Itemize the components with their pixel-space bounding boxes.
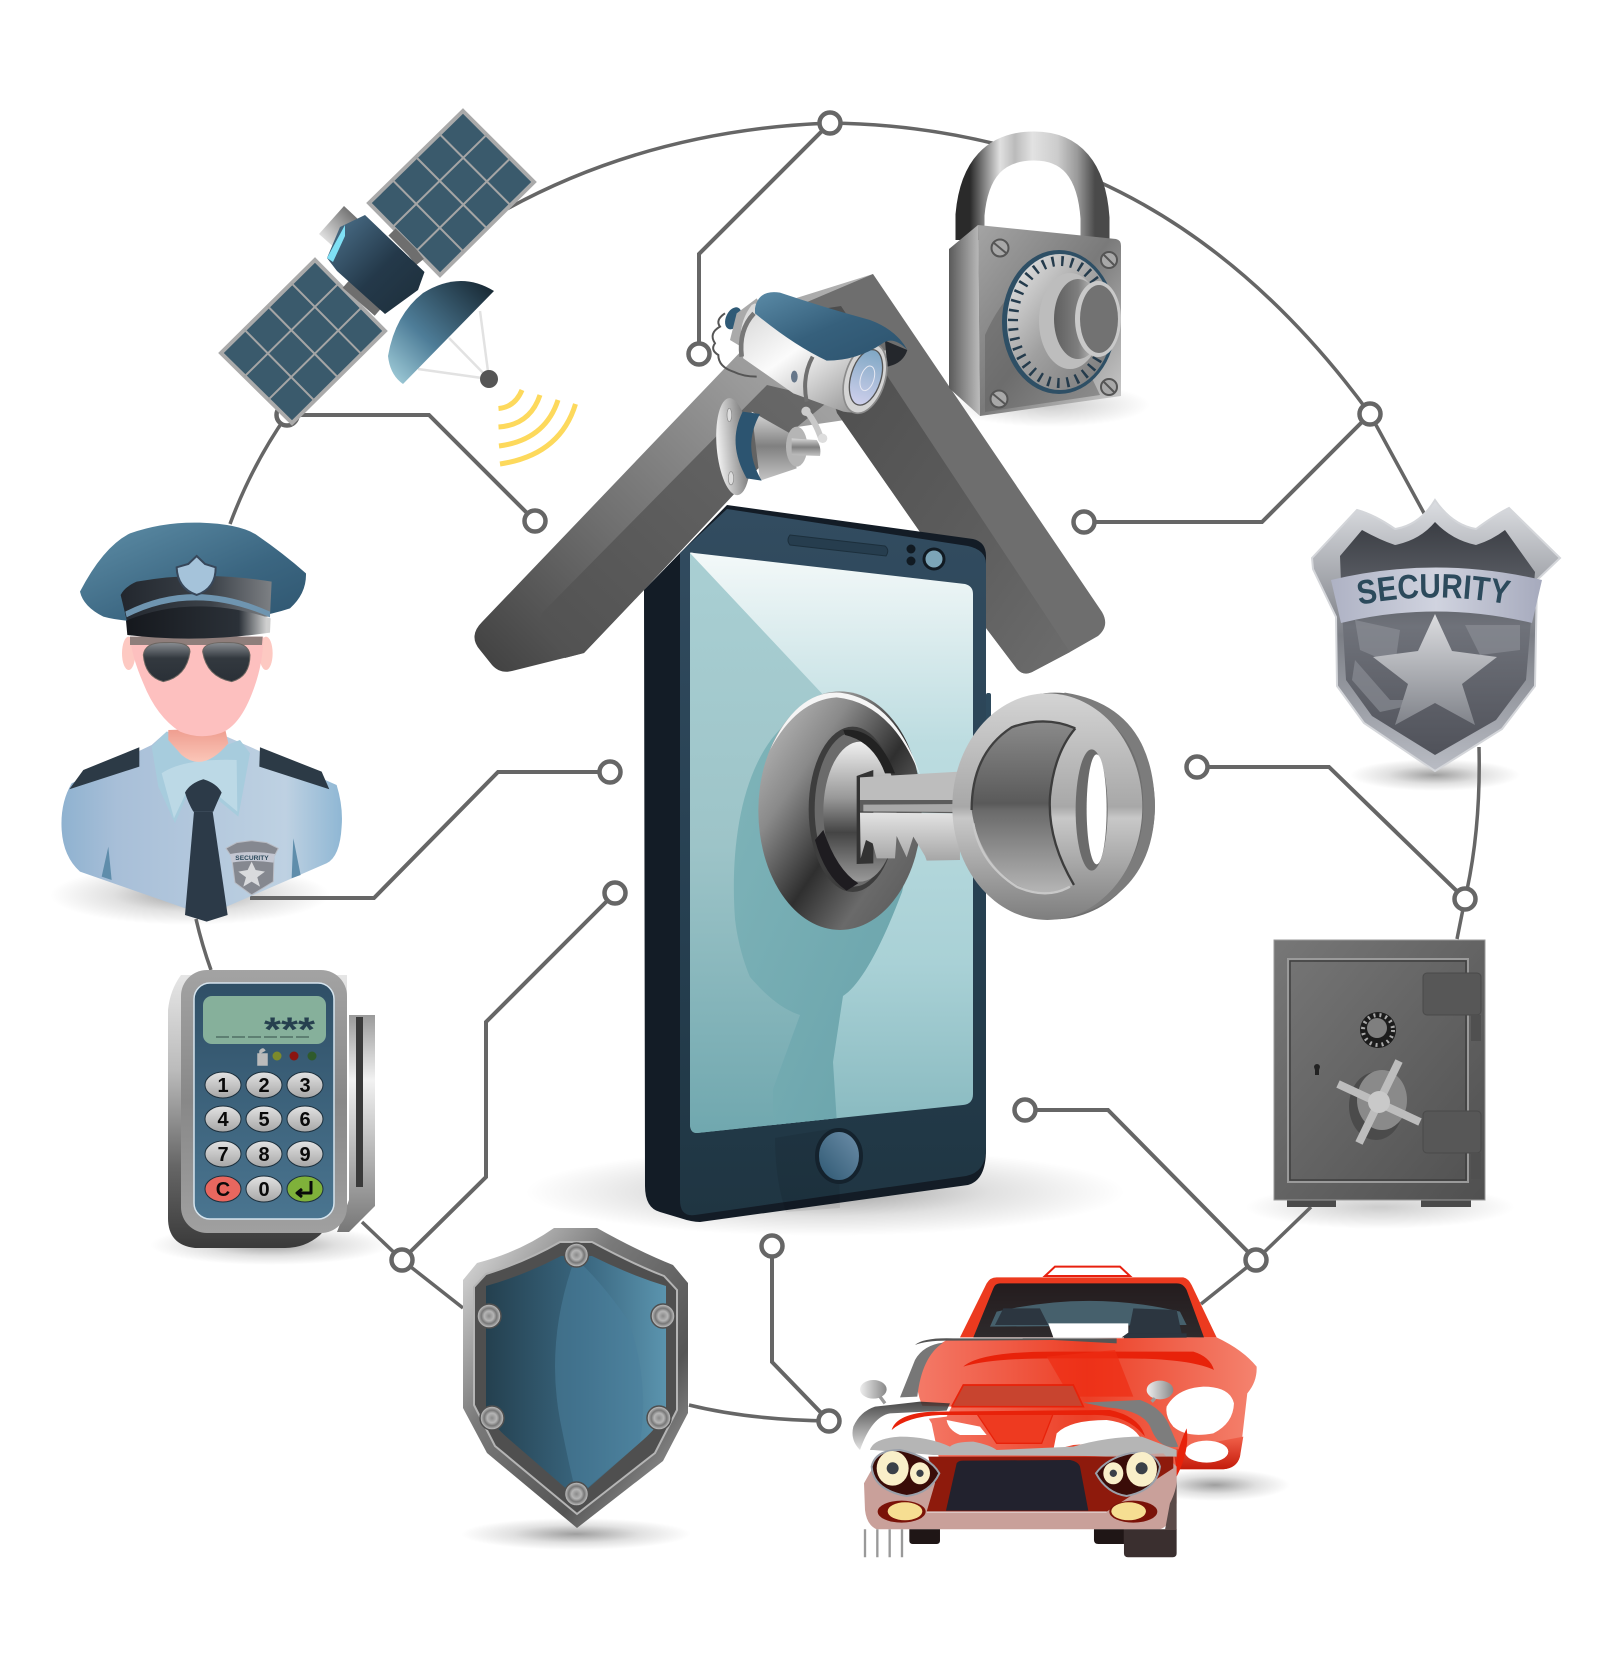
safe <box>1274 940 1485 1207</box>
speaker slot <box>788 535 888 556</box>
cap badge <box>177 556 216 595</box>
lower body <box>864 1453 1177 1529</box>
hood reflection <box>1047 1350 1133 1397</box>
cabin gap <box>1048 1323 1128 1337</box>
key buttons: 5 <box>258 1109 270 1131</box>
upper red nose <box>927 1457 1173 1512</box>
key buttons <box>205 1072 323 1202</box>
front v panel <box>977 1413 1053 1443</box>
shackle <box>970 146 1095 245</box>
chrome strip <box>870 1437 1177 1457</box>
side panel holes <box>1166 1387 1234 1463</box>
shirt badge <box>226 841 278 895</box>
seats <box>995 1308 1187 1348</box>
keypad panel <box>194 983 334 1219</box>
soft ground shadows <box>50 383 1520 1550</box>
badge plate facets <box>1352 620 1520 712</box>
key buttons: 9 <box>299 1144 311 1166</box>
solar panel: lower <box>221 260 385 423</box>
key buttons: 1 <box>217 1075 229 1097</box>
reflection under screen <box>775 1128 840 1212</box>
neck <box>168 728 228 762</box>
circuit network arc and connector lines <box>196 112 1479 1432</box>
epaulets <box>69 747 329 789</box>
sunglasses <box>143 643 250 682</box>
safe handle <box>1338 1061 1420 1143</box>
smartphone <box>644 505 991 1222</box>
key buttons: 0 <box>258 1179 270 1201</box>
roof rack <box>1045 1267 1130 1276</box>
cabin frame <box>960 1277 1217 1337</box>
headlight right <box>1096 1452 1160 1496</box>
key bow ring <box>952 693 1155 920</box>
fog lights <box>878 1501 1157 1523</box>
camera hood <box>755 292 907 361</box>
top trim <box>915 1338 1117 1345</box>
collar <box>152 732 250 823</box>
dish <box>388 281 494 384</box>
key buttons: C <box>216 1179 230 1201</box>
cap crown <box>80 523 306 622</box>
card reader <box>337 1015 375 1232</box>
key lock and key <box>758 691 1155 930</box>
solar panel: upper <box>369 111 534 275</box>
badge text: SECURITY <box>1358 574 1512 604</box>
shirt <box>61 732 342 908</box>
camera mount <box>712 397 827 497</box>
keypad body <box>168 975 347 1248</box>
hinges <box>1423 973 1481 1179</box>
side button <box>986 693 991 723</box>
front sensors <box>906 544 944 569</box>
camera housing <box>722 298 907 412</box>
security camera <box>712 292 907 497</box>
grey fender shade <box>900 1343 943 1397</box>
shield <box>463 1228 688 1528</box>
shield rim <box>463 1228 688 1528</box>
house roof <box>474 274 1105 674</box>
keypad <box>168 970 375 1248</box>
home button <box>817 1130 861 1182</box>
grille <box>946 1460 1088 1511</box>
phone side edge <box>644 505 986 1222</box>
screws <box>990 240 1117 408</box>
visor <box>126 606 271 639</box>
cap stripe <box>125 594 270 617</box>
safe body <box>1274 940 1485 1200</box>
keypad frame <box>181 970 347 1233</box>
keyhole <box>1314 1064 1320 1075</box>
key buttons: 6 <box>299 1109 311 1131</box>
red sports car <box>852 1267 1257 1557</box>
padlock <box>949 146 1121 416</box>
key buttons: 2 <box>258 1075 270 1097</box>
lcd display: *** <box>264 1011 316 1049</box>
mirrors <box>860 1380 1173 1403</box>
left wheel stripes <box>865 1529 902 1557</box>
badge inner plate <box>1340 522 1535 755</box>
face <box>130 637 263 736</box>
safe feet <box>1287 1198 1471 1207</box>
door frame <box>1288 959 1468 1182</box>
security badge <box>1311 498 1562 772</box>
police officer <box>61 523 342 922</box>
body crease <box>963 1352 1214 1370</box>
rear window <box>973 1283 1204 1337</box>
key buttons: 8 <box>258 1144 270 1166</box>
camera lens <box>835 338 895 419</box>
signal waves <box>498 390 576 464</box>
wheels <box>909 1480 1177 1557</box>
right chrome wave <box>1083 1400 1178 1447</box>
satellite <box>221 111 576 464</box>
car body <box>917 1337 1257 1469</box>
key buttons: 4 <box>217 1109 229 1131</box>
satellite body <box>327 215 424 314</box>
key shaft and teeth <box>857 770 960 864</box>
shield rivets <box>477 1243 675 1506</box>
badge ribbon <box>1331 568 1542 623</box>
lock body <box>949 225 980 416</box>
phone front panel <box>680 509 986 1215</box>
signal emitter <box>480 370 498 388</box>
chrome left <box>852 1402 950 1450</box>
badge star <box>1373 614 1497 725</box>
combination dial <box>1002 250 1121 394</box>
shirt badge: SECURITY <box>235 855 269 862</box>
headlight left <box>872 1450 939 1496</box>
lcd display <box>203 996 326 1049</box>
badge shell <box>1312 500 1560 771</box>
shirt folds <box>102 838 301 880</box>
cap band <box>121 576 272 620</box>
red front line <box>892 1410 1145 1437</box>
lock cylinder <box>758 691 922 930</box>
white front gaps <box>888 1405 1142 1450</box>
tie <box>185 779 228 922</box>
phone screen <box>685 550 977 1140</box>
ears <box>122 637 273 670</box>
key buttons: 7 <box>217 1144 229 1166</box>
hat shadow on brow <box>130 637 263 645</box>
bumper highlight <box>927 1510 1107 1513</box>
thruster <box>319 206 360 250</box>
status indicators <box>258 1049 316 1065</box>
shield blue face <box>486 1256 666 1498</box>
camera cable <box>713 313 757 377</box>
key buttons: 3 <box>299 1075 311 1097</box>
hood scoop <box>952 1385 1083 1407</box>
safe dial <box>1360 1012 1396 1048</box>
dish struts <box>418 311 489 379</box>
satellite connectors <box>346 232 420 312</box>
